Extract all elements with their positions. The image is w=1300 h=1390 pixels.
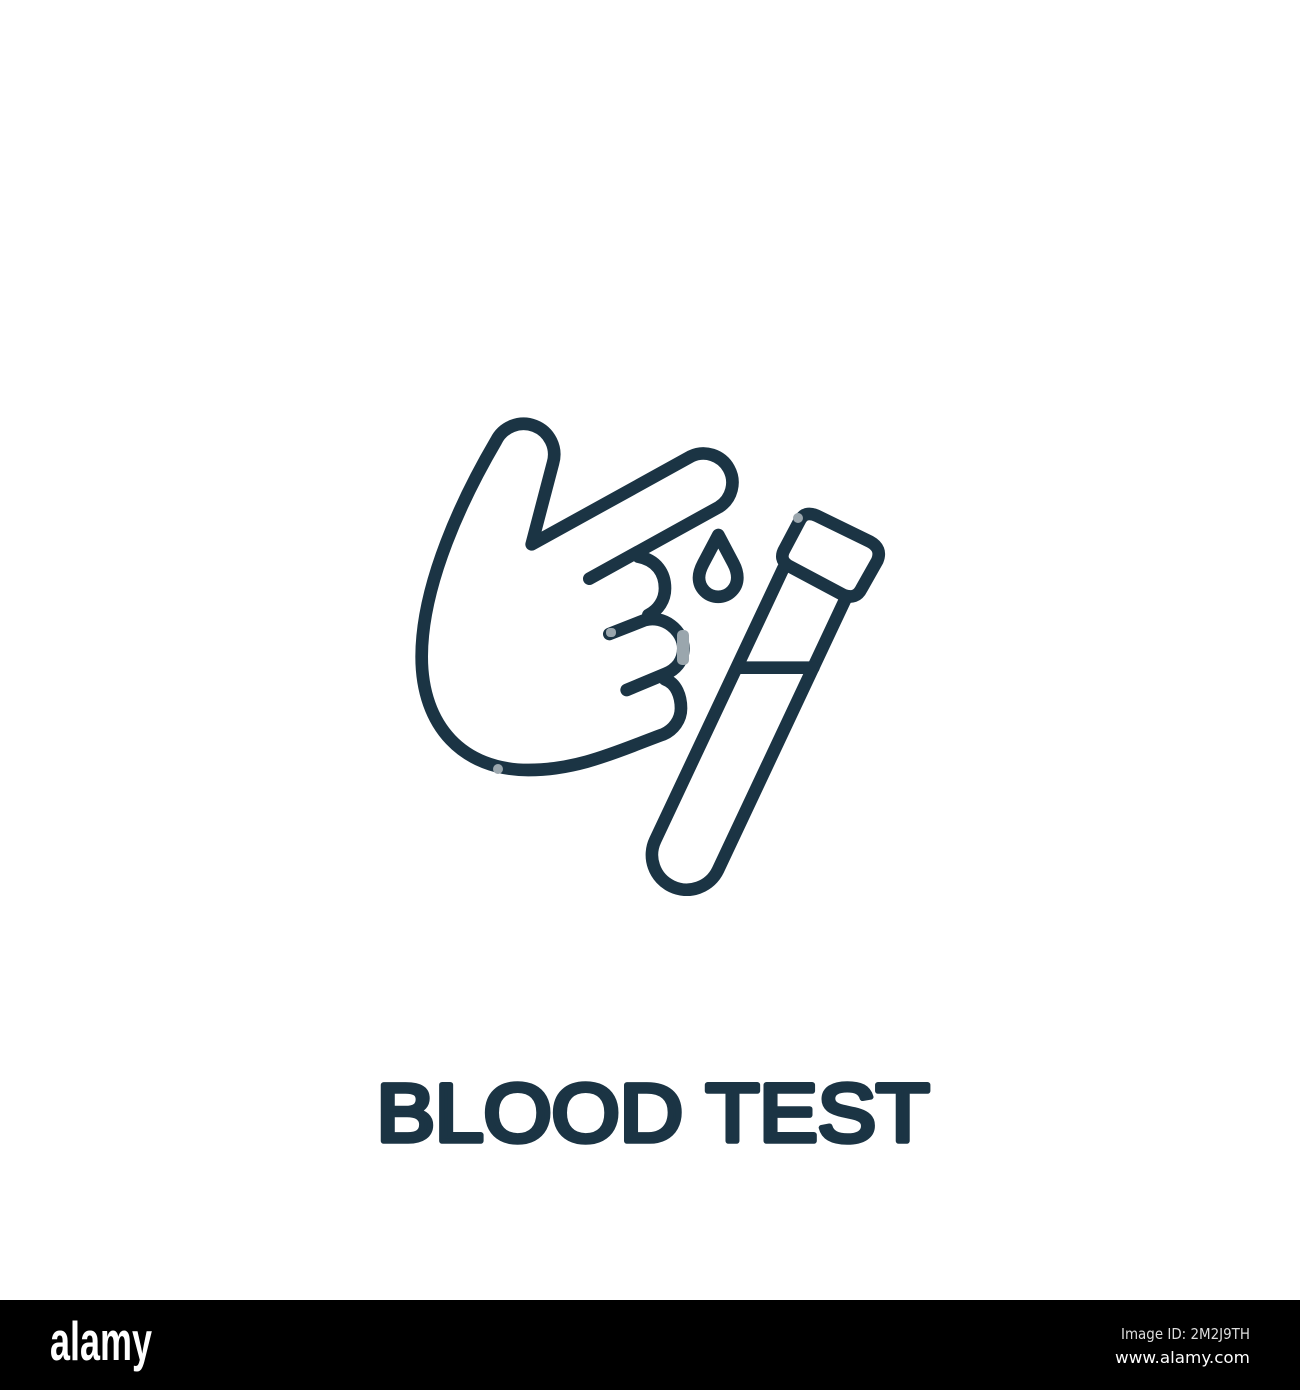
watermark fragments on the icon xyxy=(493,513,803,774)
icon: blood drop xyxy=(699,535,737,597)
icon: hand, blood drop and test tube xyxy=(422,424,879,890)
footer bar xyxy=(0,1300,1300,1390)
website: www.alamy.com xyxy=(1115,1348,1250,1367)
icon: test tube cap xyxy=(782,514,879,596)
image id: Image ID: 2M2J9TH xyxy=(1121,1325,1250,1343)
icon: test tube body xyxy=(652,568,845,890)
footer logo: alamy xyxy=(50,1310,152,1372)
icon: hand outline xyxy=(422,424,732,770)
icon: test tube liquid level xyxy=(738,649,813,687)
title: BLOOD TEST xyxy=(376,1068,930,1159)
